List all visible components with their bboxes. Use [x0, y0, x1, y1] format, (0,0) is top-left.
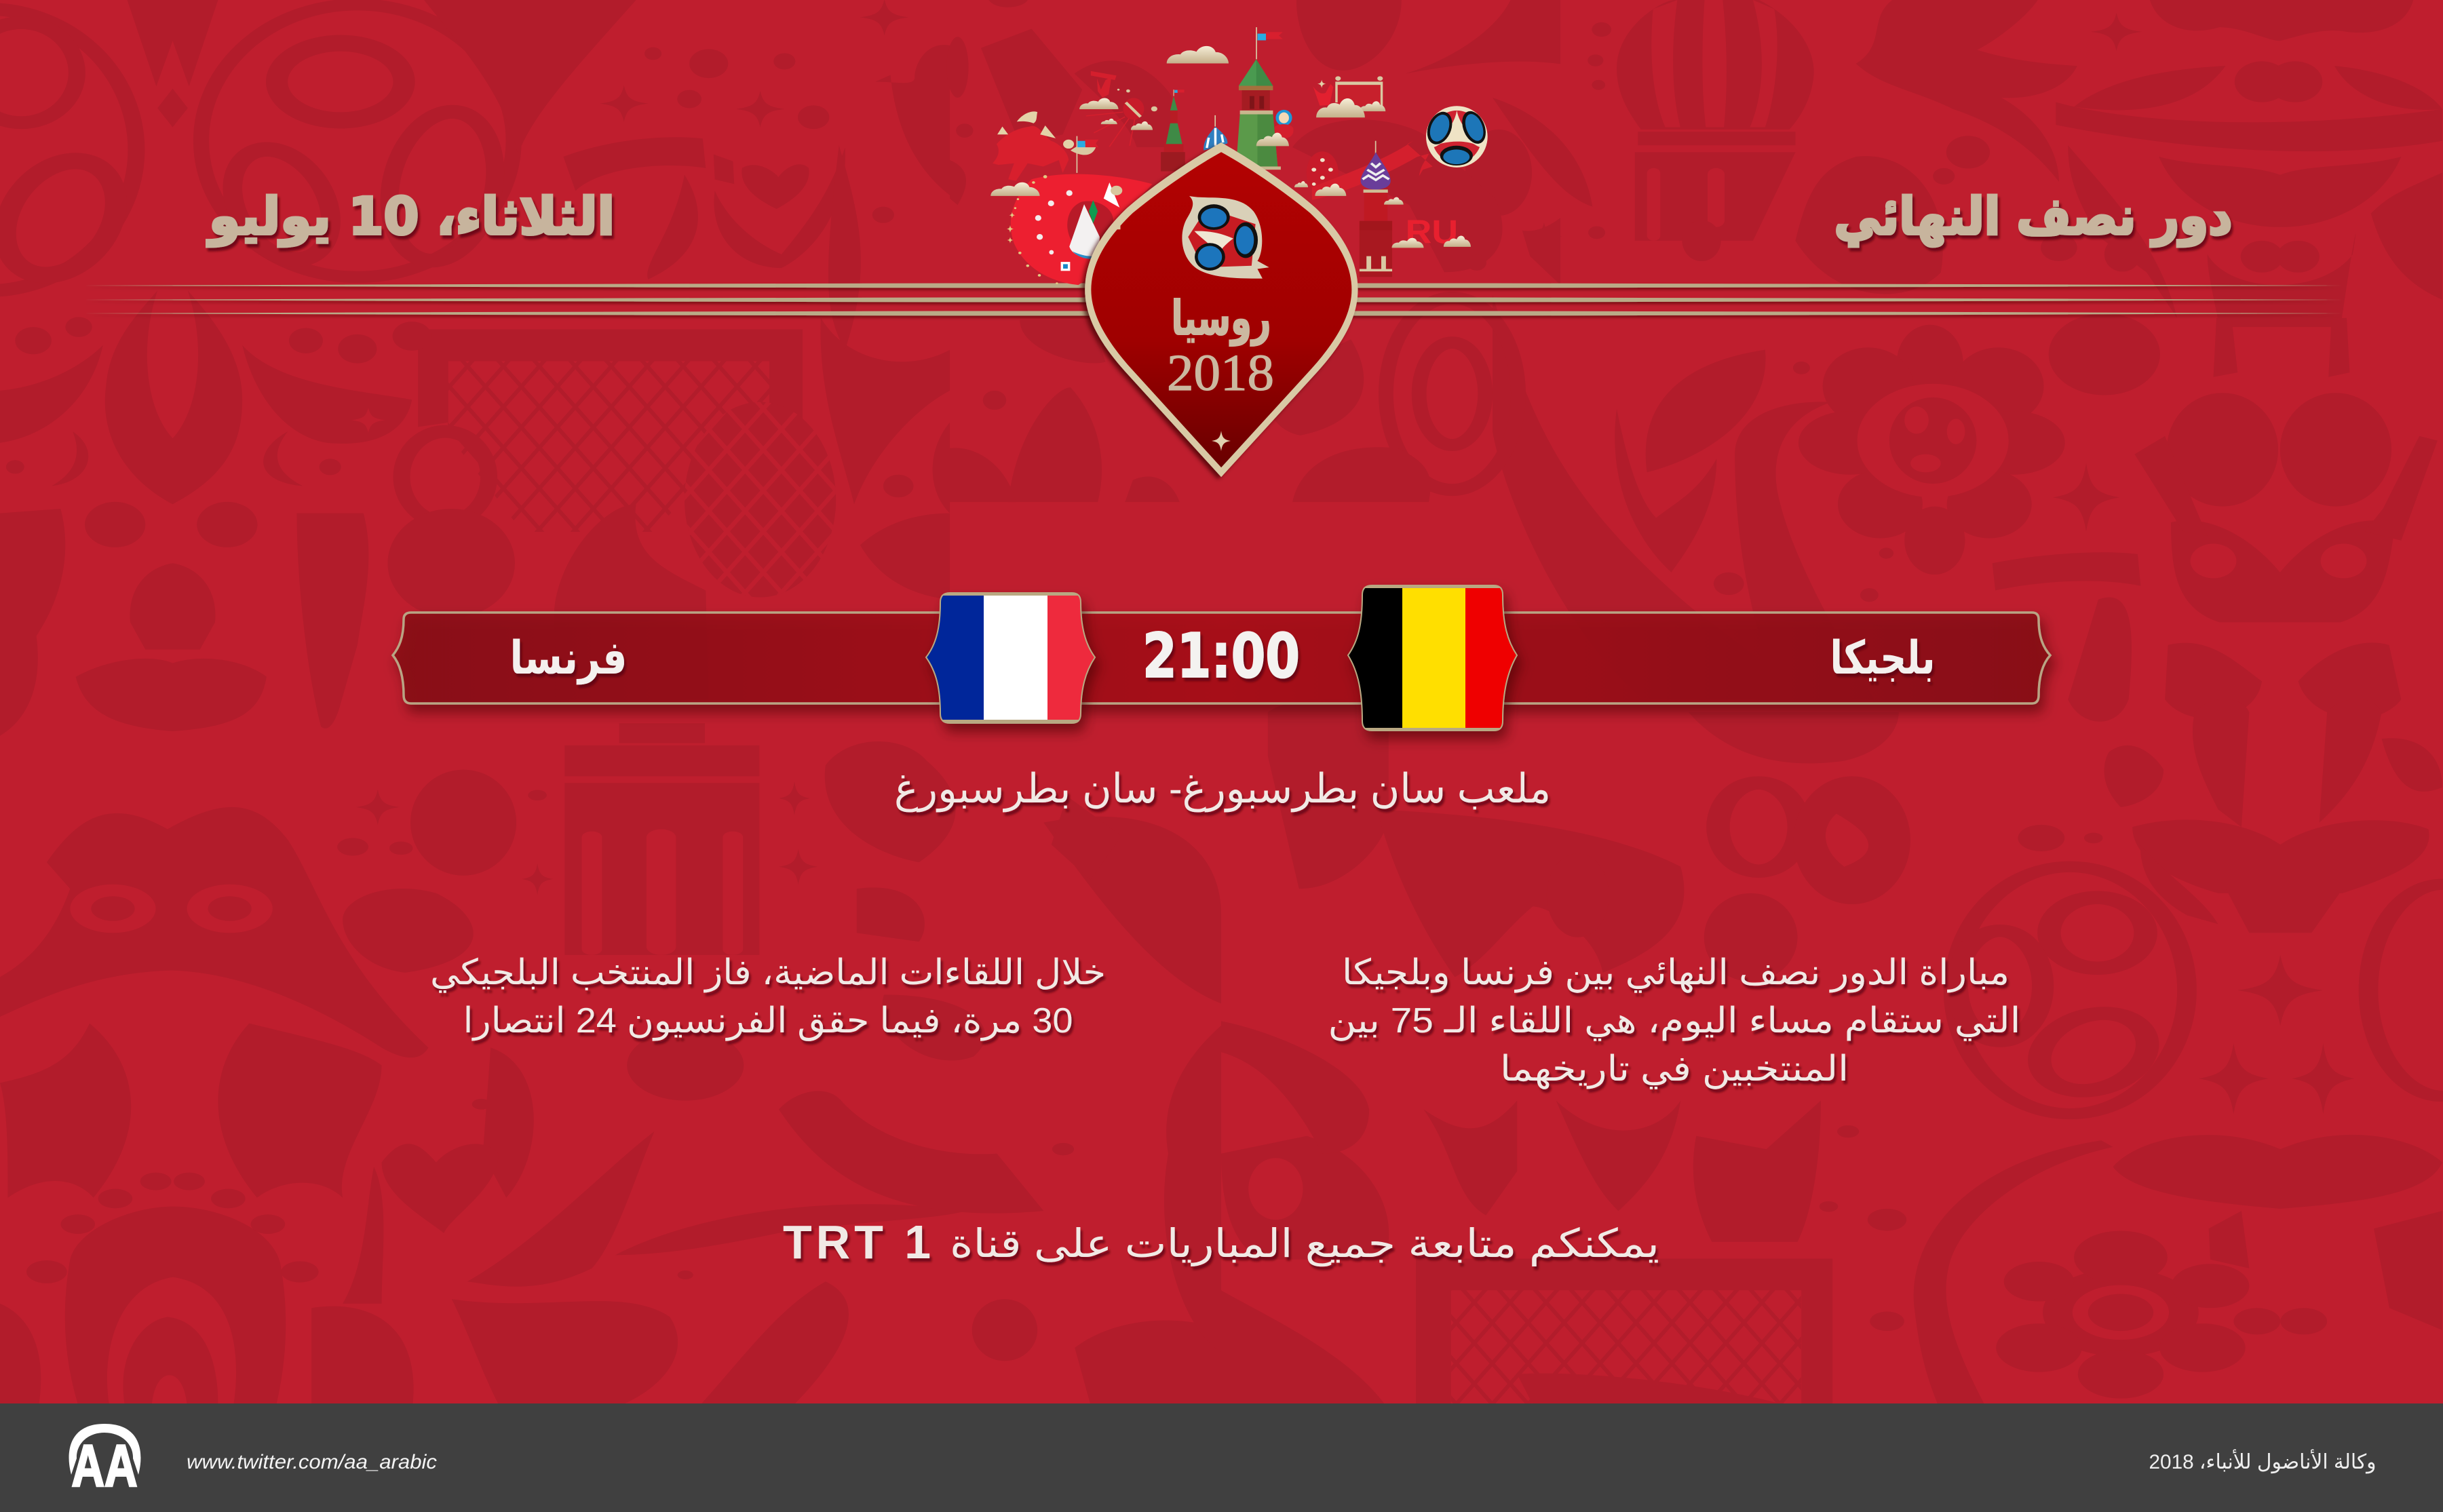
- text block: match description: التي ستقام مساء اليوم، هي اللقاء الـ 75 بين: [1328, 1001, 2020, 1041]
- heading: date: الثلاثاء، 10 يوليو: [206, 186, 615, 247]
- team name: france: فرنسا: [510, 632, 627, 685]
- footer credit: وكالة الأناضول للأنباء، 2018: [2149, 1448, 2376, 1474]
- team name: belgium: بلجيكا: [1830, 632, 1935, 685]
- pattern: top left quadrant: [0, 0, 950, 736]
- blue onion dome: [1204, 115, 1227, 151]
- pattern: bottom right quadrant: [1221, 699, 2443, 1404]
- broadcast line: يمكنكم متابعة جميع المباريات على قناة: [950, 1222, 1659, 1266]
- clouds: [990, 46, 1471, 248]
- main green tower: [1236, 27, 1283, 170]
- small kremlin tower: [1161, 90, 1185, 172]
- match time: 21:00: [1142, 621, 1300, 692]
- pattern: goal net top: [448, 361, 769, 532]
- text block: history of meetings: 30 مرة، فيما حقق الفرنسيون 24 انتصارا: [463, 1001, 1073, 1041]
- flag: france: [923, 590, 1099, 726]
- text block: match description: [1328, 953, 2020, 1089]
- bar background: [393, 613, 2050, 703]
- emblem: [1182, 196, 1269, 279]
- pattern: top middle quadrant: [946, 0, 1560, 502]
- badge text: russia: روسيا: [1171, 290, 1271, 346]
- onion tower: [1360, 141, 1392, 277]
- match bar: [393, 583, 2050, 733]
- footer bar: [0, 1403, 2443, 1512]
- ornate egg: [1307, 151, 1339, 195]
- pattern: egg lattice: [685, 402, 836, 598]
- pattern: goal net bottom: [1451, 1290, 1801, 1403]
- logo: AA: AA: [72, 1433, 137, 1499]
- site text RU: RU: [1406, 213, 1458, 250]
- footer twitter link: www.twitter.com/aa_arabic: [187, 1451, 437, 1473]
- broadcast line: TRT 1: [783, 1216, 931, 1268]
- decorative gold lines: [81, 284, 2343, 316]
- pattern: top right quadrant: [1465, 0, 2442, 722]
- broadcast line: [783, 1216, 1659, 1268]
- matryoshka doll: [1275, 110, 1294, 138]
- badge: russia 2018: [1085, 142, 1358, 477]
- text block: history of meetings: [430, 953, 1106, 1041]
- badge inner red: [1091, 152, 1351, 467]
- horse rider: [993, 111, 1098, 181]
- goal and player: [1313, 76, 1383, 106]
- illustration: world cup collage: [990, 27, 1490, 285]
- badge star: [1212, 431, 1231, 451]
- text block: match description: المنتخبين في تاريخهما: [1500, 1049, 1849, 1089]
- text block: match description: مباراة الدور نصف النهائي بين فرنسا وبلجيكا: [1342, 953, 2009, 993]
- badge outer gold frame: [1085, 142, 1358, 477]
- venue text: ملعب سان بطرسبورغ- سان بطرسبورغ: [894, 766, 1551, 813]
- heading: round: دور نصف النهائي: [1834, 186, 2232, 247]
- red ribbon to ball: [1312, 141, 1433, 200]
- badge text: year: 2018: [1167, 345, 1274, 402]
- red swirl: [1007, 174, 1152, 285]
- pattern: bottom left quadrant: [0, 723, 1221, 1404]
- sputnik and player: [1086, 71, 1157, 147]
- football: [1423, 106, 1490, 168]
- flag: belgium: [1343, 583, 1520, 733]
- text block: history of meetings: خلال اللقاءات الماضية، فاز المنتخب البلجيكي: [430, 953, 1106, 993]
